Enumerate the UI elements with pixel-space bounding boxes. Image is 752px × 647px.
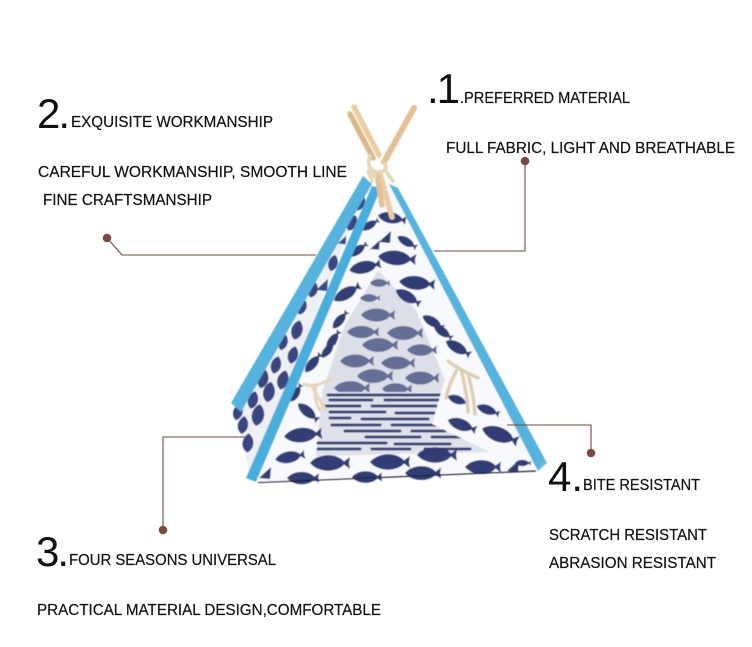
left door rope tie [304,378,332,410]
feature 2 description: CAREFUL WORKMANSHIP, SMOOTH LINE [38,164,347,181]
callout line 1: preferred material [434,157,529,251]
tent poles [350,107,414,217]
door flap fish pattern [288,210,473,424]
feature 1 heading [427,65,630,112]
feature 4 description [549,527,717,572]
illustration: teepee tent [231,107,547,484]
tent left outer blue trim [231,176,372,412]
feature 1 description: FULL FABRIC, LIGHT AND BREATHABLE [446,140,735,157]
callout line 4: bite resistant [507,425,595,457]
feature 2 description [38,164,347,209]
rope tie at top [368,156,393,181]
tent bottom shadow edge [258,471,536,482]
front-left blue trim [246,186,381,482]
feature 4 heading: BITE RESISTANT [583,477,700,494]
feature 1 heading: .PREFERRED MATERIAL [460,90,630,107]
right door flap [432,372,530,465]
tent left side panel [231,190,368,478]
feature 2 heading: 2. [37,90,70,137]
feature 3 heading [36,528,276,575]
callout line 3: four seasons universal [159,437,245,534]
feature 3 description: PRACTICAL MATERIAL DESIGN,COMFORTABLE [37,602,381,619]
feature 2 heading: EXQUISITE WORKMANSHIP [71,114,273,131]
feature 3 heading: FOUR SEASONS UNIVERSAL [69,552,276,569]
white glow behind number 4 [545,461,579,495]
interior floor [316,392,490,456]
feature 4 description: ABRASION RESISTANT [549,555,717,572]
bottom fish pattern [259,392,531,484]
feature 1 heading: .1 [427,65,460,112]
feature 4 heading: 4. [548,453,583,500]
feature 4 description: SCRATCH RESISTANT [549,527,707,544]
tent front panel [255,186,540,484]
feature 4 heading [548,453,700,500]
right door rope tie [446,361,478,414]
feature 3 heading: 3. [36,528,69,575]
interior back wall [322,270,450,392]
feature 2 description: FINE CRAFTSMANSHIP [43,192,212,209]
feature 2 heading [37,90,273,137]
callout line 2: exquisite workmanship [103,234,316,255]
right blue trim [389,184,547,471]
